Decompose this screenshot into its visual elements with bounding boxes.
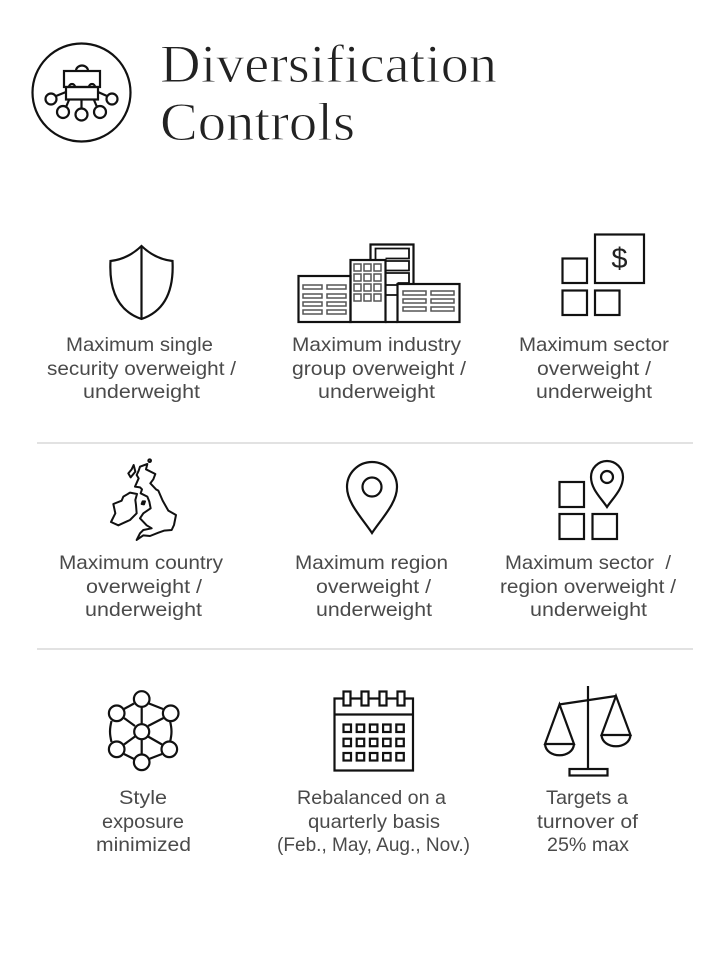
text: sector and region: Maximum sector /: [505, 552, 672, 574]
panel: turnover: [537, 686, 639, 856]
text: rebalancing: quarterly basis: [308, 811, 440, 833]
text: sector and region: region overweight /: [500, 576, 677, 598]
text: rebalancing: (Feb., May, Aug., Nov.): [277, 834, 470, 856]
text: turnover: Targets a: [546, 787, 628, 809]
text: turnover: 25% max: [547, 834, 629, 856]
text: sector and region: underweight: [530, 599, 648, 621]
text: single security: security overweight /: [47, 358, 237, 380]
icon: calendar: [334, 692, 413, 770]
panel: single security: [47, 246, 237, 403]
panel: region: [295, 462, 448, 621]
text: turnover: [537, 787, 639, 856]
icon: balance scales: [545, 686, 630, 776]
icon: shield: [110, 246, 173, 319]
panel: country: [59, 459, 223, 621]
icon: squares with dollar: $: [611, 243, 628, 275]
text: sector: Maximum sector: [519, 334, 670, 356]
panel: sector and region: [500, 461, 677, 621]
text: region: underweight: [316, 599, 433, 621]
panel: industry group: [292, 244, 467, 403]
icon: squares with pin: [560, 461, 623, 539]
text: style exposure: [96, 787, 191, 856]
text: industry group: [292, 334, 467, 403]
title: [160, 34, 497, 152]
icon: UK and Ireland map: [111, 459, 176, 540]
text: single security: [47, 334, 237, 403]
text: single security: Maximum single: [66, 334, 213, 356]
text: single security: underweight: [83, 381, 201, 403]
icon: squares with dollar: [562, 234, 644, 315]
text: country: [59, 552, 223, 621]
text: industry group: group overweight /: [292, 358, 467, 380]
icon: hexagon network: [109, 691, 178, 770]
text: sector and region: [500, 552, 677, 621]
panel: sector: [519, 234, 670, 403]
icon: map pin: [347, 462, 397, 533]
title: Controls: [160, 92, 355, 152]
text: rebalancing: [277, 787, 470, 856]
text: country: Maximum country: [59, 552, 223, 574]
text: turnover: turnover of: [537, 811, 639, 833]
text: sector: overweight /: [537, 358, 652, 380]
text: industry group: Maximum industry: [292, 334, 461, 356]
text: sector: [519, 334, 670, 403]
text: style exposure: exposure: [102, 811, 184, 833]
text: style exposure: minimized: [96, 834, 191, 856]
text: country: underweight: [85, 599, 203, 621]
panel: rebalancing: [277, 692, 470, 856]
text: industry group: underweight: [318, 381, 436, 403]
text: region: overweight /: [316, 576, 432, 598]
title: Diversification: [160, 34, 497, 94]
text: sector: underweight: [536, 381, 653, 403]
text: region: [295, 552, 448, 621]
icon: briefcase network badge: [32, 44, 130, 142]
icon: buildings: [298, 244, 460, 322]
text: style exposure: Style: [119, 787, 167, 809]
panel: style exposure: [96, 691, 191, 856]
text: region: Maximum region: [295, 552, 448, 574]
text: country: overweight /: [86, 576, 203, 598]
text: rebalancing: Rebalanced on a: [297, 787, 446, 809]
